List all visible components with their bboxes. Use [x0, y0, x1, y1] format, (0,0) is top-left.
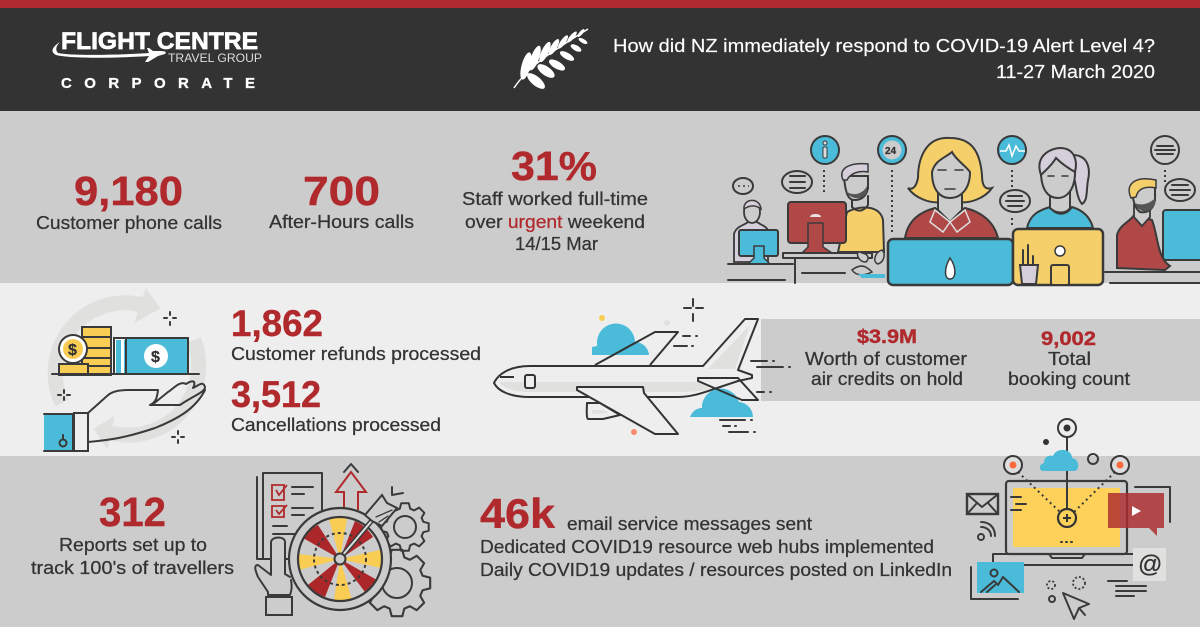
icon: pulse bubble: [998, 136, 1026, 226]
icon: open hand: [44, 381, 205, 451]
icon: up arrow: [336, 464, 403, 510]
icon: network nodes: [1004, 419, 1129, 474]
icon: cursor: [1047, 577, 1089, 619]
illustration: call centre team: [728, 136, 1200, 285]
stat: email messages: 46k: [480, 490, 556, 537]
icon: circular arrows: [55, 290, 199, 447]
stat: staff worked full-time: 14/15 Mar: [515, 234, 598, 254]
icon: info bubble: [811, 136, 839, 193]
stat: after-hours calls: [269, 168, 414, 232]
panel: air credits and bookings: [761, 319, 1200, 401]
icon: banknotes: [114, 338, 188, 374]
title: [613, 36, 1155, 82]
stat: total booking count: [1008, 329, 1130, 389]
icon: checklist: [257, 473, 322, 559]
icon: laptop: [993, 437, 1133, 565]
stat: email messages: [480, 490, 812, 537]
icon: cloud: [1040, 450, 1078, 471]
illustration: money refund in hand: [44, 290, 205, 451]
icon: at sign: [1133, 548, 1166, 581]
panel: header: [0, 0, 1200, 111]
stat: reports: 312: [99, 489, 166, 535]
stat: total booking count: Total: [1048, 349, 1091, 369]
stat: after-hours calls: After-Hours calls: [269, 212, 414, 232]
stat: total booking count: 9,002: [1041, 329, 1096, 350]
stat: air credits on hold: Worth of customer: [805, 349, 967, 369]
icon: coins: [59, 327, 111, 375]
small man with blue monitor: [728, 178, 793, 280]
stat: customer refunds: 1,862: [231, 303, 323, 344]
stat: cancellations: Cancellations processed: [231, 415, 441, 435]
stat: air credits on hold: $3.9M: [857, 327, 917, 348]
stat: total booking count: booking count: [1008, 369, 1130, 389]
icon: dartboard: [289, 495, 397, 610]
stat: reports: Reports set up to: [59, 535, 207, 555]
icon: wifi: [978, 522, 995, 540]
logo: Flight Centre: TRAVEL GROUP: [168, 53, 262, 65]
man with red monitor: [782, 164, 884, 283]
stat: staff worked full-time: Staff worked full-time: [462, 189, 648, 209]
icon: pointing hand: [255, 538, 292, 615]
icon: clouds: [592, 323, 753, 417]
panel: middle band: [0, 283, 1200, 456]
stat: air credits on hold: [805, 327, 967, 389]
title: 11-27 March 2020: [996, 62, 1155, 82]
logo: Flight Centre: FLIGHT CENTRE: [61, 28, 258, 55]
icon: photo: [971, 562, 1024, 599]
icon: 24 bubble: 24: [885, 146, 897, 157]
woman in blue with yellow laptop: [1013, 148, 1103, 285]
icon: 24 bubble: [878, 136, 906, 232]
stat: customer phone calls: 9,180: [74, 168, 183, 214]
text: daily updates: Daily COVID19 updates / resources posted on LinkedIn: [480, 560, 952, 580]
stat: customer phone calls: Customer phone calls: [36, 213, 222, 233]
plane fuselage: [494, 319, 758, 419]
icon: at sign: @: [1138, 551, 1162, 578]
title: How did NZ immediately respond to COVID-19 Alert Level 4?: [613, 36, 1155, 56]
stat: staff worked full-time: over urgent weekend: [465, 212, 645, 232]
stat: customer refunds: Customer refunds processed: [231, 344, 481, 364]
plane wings: [500, 332, 758, 434]
icon: gears: [364, 503, 430, 616]
icon: banknotes: $: [151, 349, 160, 366]
stat: air credits on hold: air credits on hold: [811, 369, 963, 389]
stat: reports: track 100's of travellers: [31, 558, 234, 578]
icon: silver fern: [514, 28, 588, 92]
stat: cancellations: [231, 374, 441, 435]
illustration: plane: [494, 299, 790, 435]
stat: cancellations: 3,512: [231, 374, 321, 415]
speech bubble: [1000, 190, 1030, 212]
logo: Flight Centre: [53, 28, 262, 92]
illustration: digital channels laptop: [967, 419, 1170, 619]
man in red with blue monitor: [1105, 136, 1200, 283]
woman in red with blue laptop: [888, 138, 1013, 285]
illustration: target and checklist: [255, 464, 430, 616]
icon: coins: $: [68, 342, 77, 359]
stat: customer refunds: [231, 303, 481, 364]
logo: Flight Centre: CORPORATE: [61, 75, 255, 92]
icon: envelope: [967, 494, 998, 514]
plant: [852, 250, 885, 278]
stat: staff worked full-time: 31%: [511, 143, 597, 189]
stat: staff worked full-time: [462, 143, 648, 254]
stat: customer phone calls: [36, 168, 222, 233]
text: web hubs: Dedicated COVID19 resource web hubs implemented: [480, 537, 934, 557]
stat: after-hours calls: 700: [303, 168, 380, 214]
stat: email messages: email service messages sent: [567, 514, 812, 534]
stat: reports: [31, 489, 234, 578]
icon: video bubble: [1108, 487, 1170, 536]
